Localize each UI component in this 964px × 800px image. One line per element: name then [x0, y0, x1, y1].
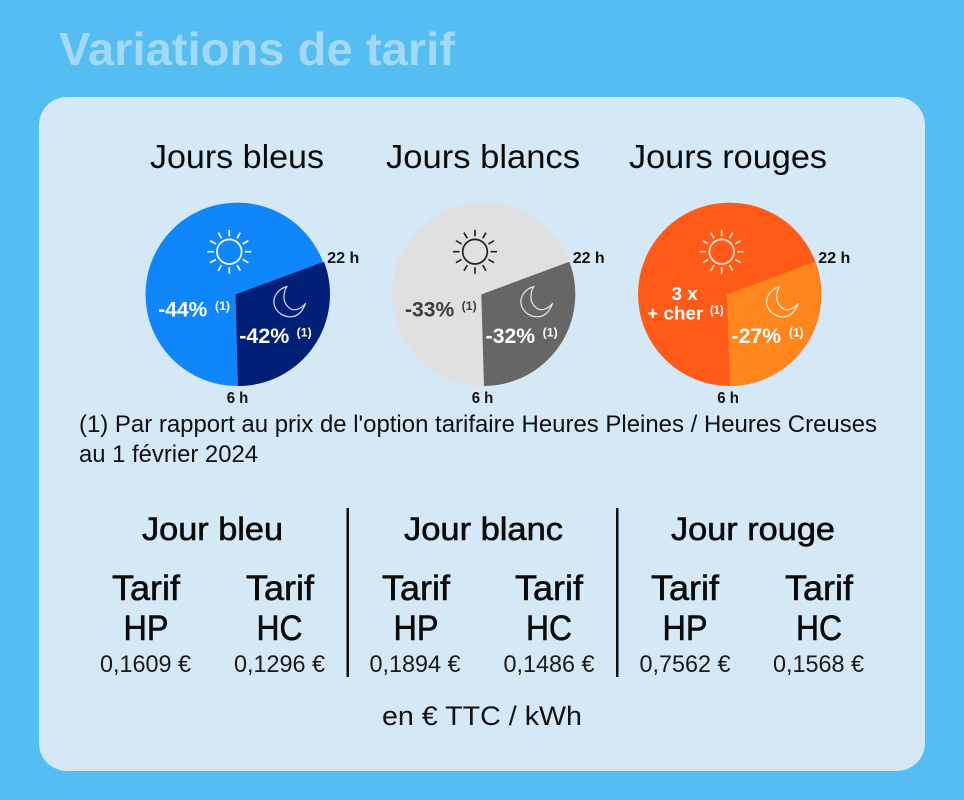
footnote mark: (1): [710, 303, 724, 317]
heading: Jour rouge: Jour rouge: [671, 511, 835, 547]
label: -27%: -27%: [732, 325, 781, 348]
tariff HC: [234, 569, 326, 678]
tariff HP: 0,1609 €: [100, 651, 192, 678]
heading: Jours blancs: Jours blancs: [386, 138, 580, 175]
tariff column: jour blanc: [370, 511, 595, 678]
heading: Jours rouges: Jours rouges: [629, 138, 827, 175]
heading: Jour blanc: Jour blanc: [404, 511, 563, 547]
icon: sun: [453, 230, 497, 274]
tariff HC: [773, 569, 865, 678]
footnote mark: (1): [215, 299, 230, 313]
tariff HP: [370, 569, 461, 678]
tariff column: jour rouge: [640, 511, 865, 678]
tariff HC: 0,1296 €: [234, 651, 326, 678]
tariff HP: 0,1894 €: [370, 651, 461, 678]
tariff HP: 0,7562 €: [640, 651, 731, 678]
tariff HC: Tarif: [515, 569, 583, 608]
icon: sun: [700, 230, 744, 274]
footnote text: [79, 411, 877, 468]
label: 6 h: 6 h: [717, 390, 739, 407]
tariff HP: [100, 569, 192, 678]
tariff HP: HP: [662, 609, 708, 648]
tariff HP: Tarif: [112, 569, 180, 608]
label: 6 h: 6 h: [472, 390, 493, 407]
tariff HC: HC: [796, 609, 842, 648]
tariff HC: HC: [256, 609, 302, 648]
tariff HP: HP: [124, 609, 168, 648]
tariff HP: HP: [394, 609, 438, 648]
tariff HC: HC: [526, 609, 572, 648]
label: + cher: + cher: [647, 304, 703, 324]
label: -44%: -44%: [158, 298, 208, 322]
tariff HC: 0,1486 €: [504, 651, 595, 678]
footnote text: (1) Par rapport au prix de l'option tarifaire Heures Pleines / Heures Creuses: [79, 411, 877, 438]
pie chart: jours rouges: [638, 203, 850, 407]
tariff HC: Tarif: [785, 569, 853, 608]
footnote mark: (1): [789, 326, 804, 340]
heading: Jour bleu: Jour bleu: [142, 511, 283, 547]
tariff column: jour bleu: [100, 511, 326, 678]
icon: moon: [767, 286, 798, 317]
tariff HC: Tarif: [246, 569, 314, 608]
icon: moon: [521, 286, 552, 317]
label: 22 h: 22 h: [573, 250, 605, 267]
tariff HC: [504, 569, 595, 678]
footnote text: au 1 février 2024: [79, 441, 258, 468]
footnote mark: (1): [297, 326, 312, 340]
label: -33%: -33%: [405, 298, 455, 322]
panel: main card: [39, 97, 925, 771]
tariff HP: Tarif: [651, 569, 719, 608]
title: Variations de tarif: [59, 23, 456, 75]
footnote mark: (1): [462, 299, 477, 313]
label: 6 h: 6 h: [227, 390, 248, 407]
icon: moon: [274, 286, 306, 317]
label: -32%: -32%: [486, 325, 535, 348]
label: 22 h: 22 h: [818, 250, 850, 267]
tariff HC: 0,1568 €: [773, 651, 865, 678]
footnote mark: (1): [543, 326, 558, 340]
heading: Jours bleus: Jours bleus: [150, 138, 324, 175]
icon: sun: [207, 230, 251, 274]
unit note: en € TTC / kWh: [382, 701, 582, 731]
pie chart: jours blancs: [392, 203, 605, 407]
tariff HP: [640, 569, 731, 678]
label: 22 h: 22 h: [327, 250, 359, 267]
label: -42%: -42%: [239, 325, 290, 348]
label: 3 x: 3 x: [672, 284, 698, 304]
tariff HP: Tarif: [382, 569, 450, 608]
pie chart: jours bleus: [146, 203, 359, 407]
